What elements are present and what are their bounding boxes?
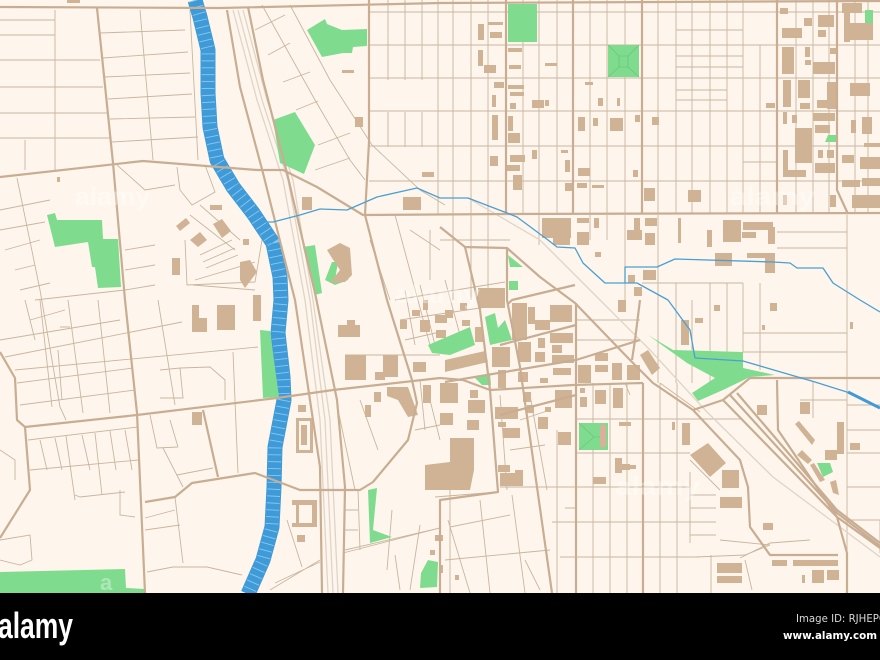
footer bar xyxy=(0,593,880,660)
creek xyxy=(265,188,880,408)
alamy watermarks: a xyxy=(100,570,113,595)
alamy watermarks: alamy xyxy=(730,181,816,211)
alamy watermarks: alamy xyxy=(395,279,481,309)
alamy watermarks xyxy=(75,181,816,595)
baseball infield xyxy=(600,425,606,447)
alamy watermarks: alamy xyxy=(615,471,701,501)
river with concrete channel stripes xyxy=(195,0,284,594)
park paths xyxy=(579,45,639,450)
alamy logo: alamy xyxy=(0,605,73,646)
creek wider reach xyxy=(848,392,880,408)
railroad and freeway lanes xyxy=(233,10,880,593)
website: www.alamy.com xyxy=(783,629,877,642)
alamy watermarks: alamy xyxy=(75,181,151,211)
